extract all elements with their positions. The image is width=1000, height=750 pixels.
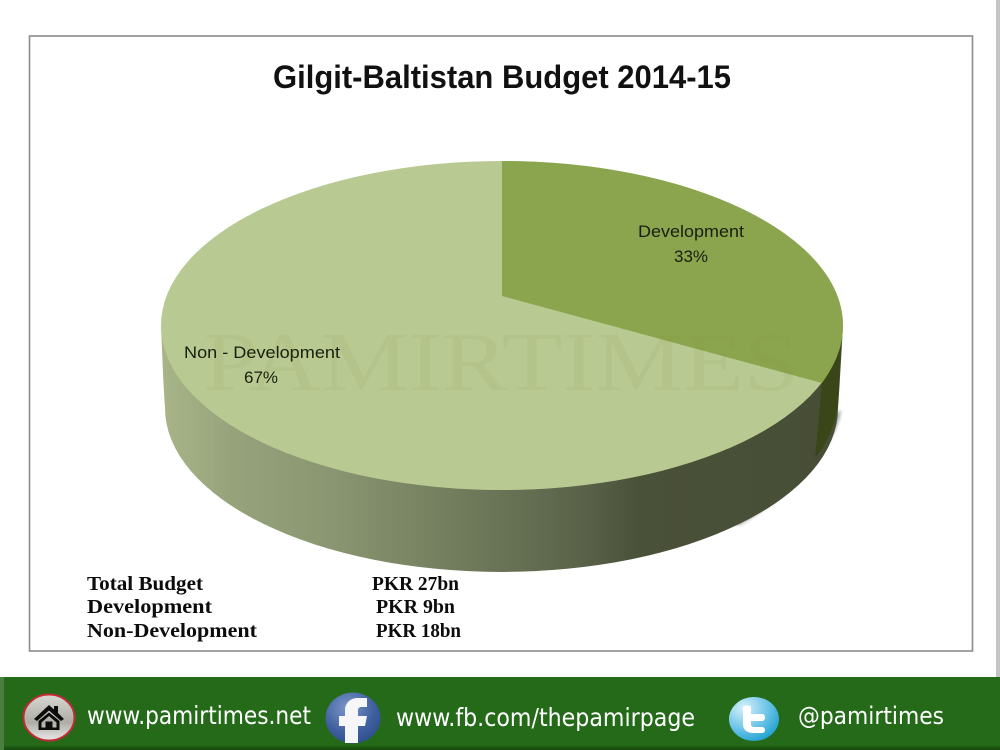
3D pie chart	[161, 161, 843, 572]
budget figures table: Non-Development	[87, 620, 257, 642]
icon: twitter	[729, 697, 779, 741]
page right edge shadow	[996, 0, 1000, 677]
label: non-development: Non - Development	[184, 343, 340, 362]
chart panel frame	[30, 36, 972, 651]
text: twitter handle: @pamirtimes	[798, 702, 944, 730]
slice: non-development	[161, 161, 843, 490]
text: website: www.pamirtimes.net	[87, 701, 311, 730]
budget figures table: Total Budget	[87, 573, 203, 595]
label: development: Development	[638, 222, 744, 241]
label: non-development: 67%	[244, 368, 278, 387]
title: Gilgit-Baltistan Budget 2014-15	[273, 59, 731, 95]
budget figures table: PKR 27bn	[372, 573, 459, 595]
footer bar	[0, 677, 1000, 750]
dark side wall segment	[815, 345, 841, 458]
budget figures table: PKR 18bn	[376, 620, 461, 642]
pie drop shadow	[700, 410, 841, 525]
slice: development	[502, 161, 843, 383]
icon: home	[24, 694, 74, 740]
budget figures table: Development	[87, 596, 212, 618]
pie side wall	[161, 325, 843, 572]
watermark: PAMIRTIMES	[203, 316, 799, 409]
icon: facebook	[326, 692, 380, 744]
budget figures table	[87, 573, 461, 642]
budget figures table: PKR 9bn	[376, 596, 455, 618]
label: development: 33%	[674, 247, 708, 266]
text: facebook page: www.fb.com/thepamirpage	[396, 703, 695, 732]
